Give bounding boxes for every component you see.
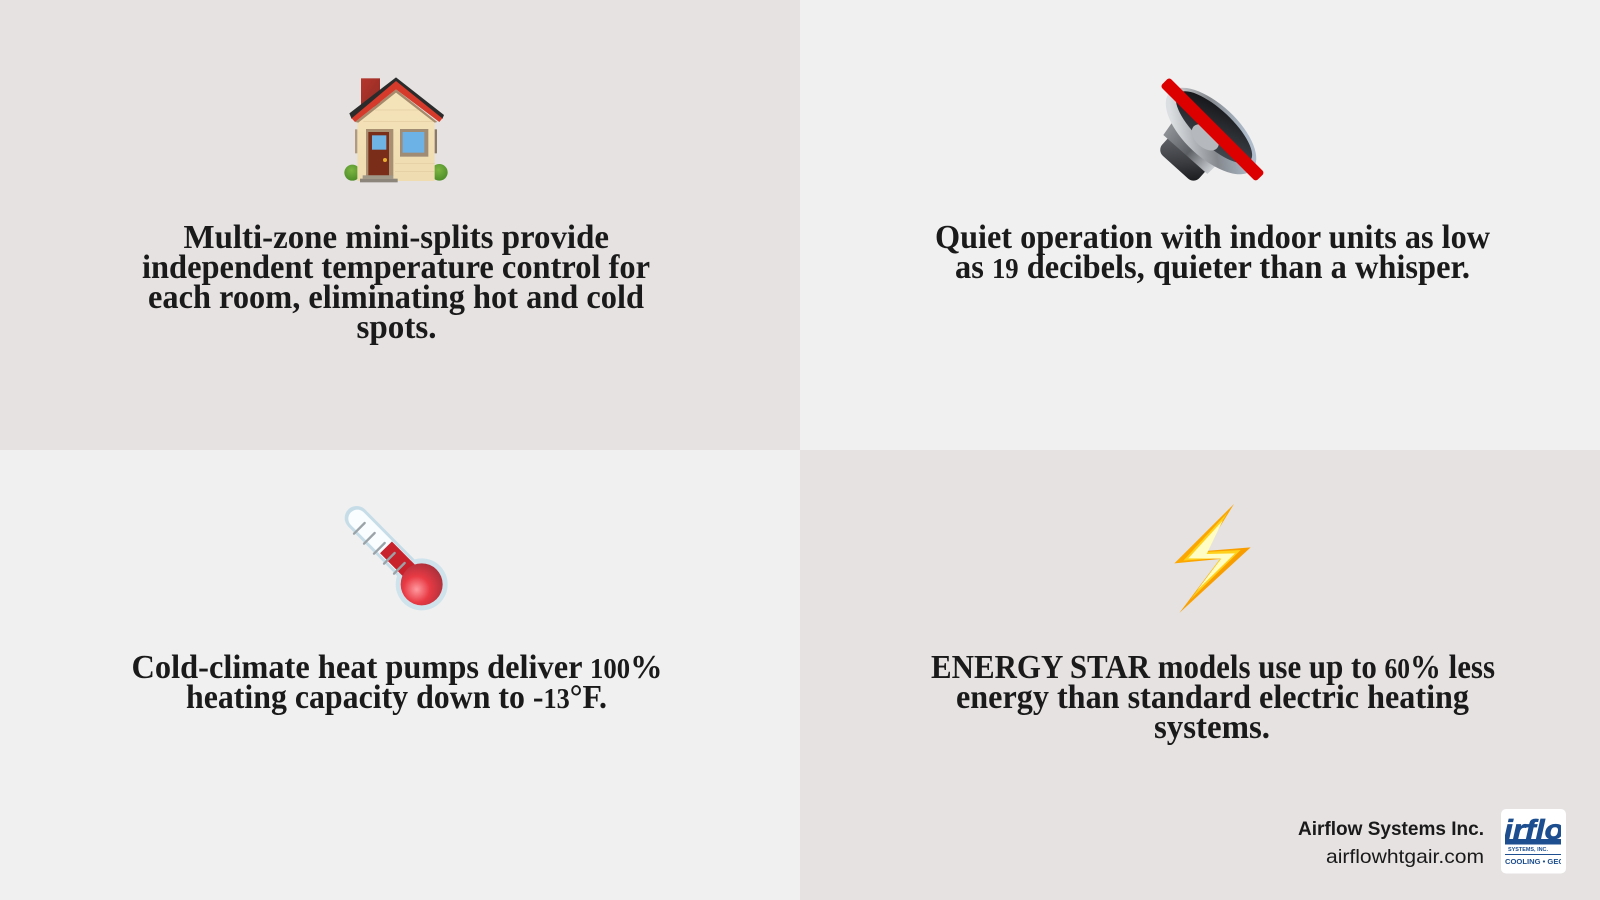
text: energy savings statement	[931, 649, 1495, 746]
panel: cold climate performance	[0, 450, 800, 900]
company name and website: airflowhtgair.com	[1326, 846, 1484, 868]
icon: muted speaker	[1151, 73, 1271, 189]
icon: lightning bolt	[1174, 504, 1251, 613]
text: multi-zone statement	[142, 219, 650, 346]
panel background	[800, 0, 1600, 450]
panel background	[800, 450, 1600, 900]
text: cold climate statement	[132, 649, 662, 716]
panel: energy savings	[800, 450, 1600, 900]
panel: multi-zone comfort	[0, 0, 800, 450]
text: quiet operation statement: Quiet operation with indoor units as low	[935, 219, 1490, 256]
text: quiet operation statement: as 19 decibels, quieter than a whisper.	[955, 249, 1470, 286]
text: cold climate statement: Cold-climate heat pumps deliver 100%	[132, 649, 662, 686]
panel background	[0, 0, 800, 450]
panel background	[0, 450, 800, 900]
text: energy savings statement: ENERGY STAR models use up to 60% less	[931, 649, 1495, 686]
text: quiet operation statement	[935, 219, 1490, 286]
text: multi-zone statement: each room, eliminating hot and cold	[148, 279, 644, 316]
company name and website: Airflow Systems Inc.	[1298, 819, 1484, 840]
text: cold climate statement: heating capacity down to -13°F.	[186, 679, 607, 716]
icon: thermometer	[354, 518, 448, 610]
text: multi-zone statement: spots.	[356, 309, 436, 346]
company name and website	[1298, 819, 1484, 868]
logo: Airflow Systems: irflo	[1504, 814, 1564, 845]
panel: quiet operation	[800, 0, 1600, 450]
text: energy savings statement: systems.	[1154, 709, 1270, 746]
text: energy savings statement: energy than standard electric heating	[956, 679, 1469, 716]
logo: Airflow Systems: COOLING • GEOT	[1505, 857, 1569, 866]
icon: house	[344, 77, 448, 182]
logo: Airflow Systems: SYSTEMS, INC.	[1508, 847, 1548, 853]
logo: Airflow Systems	[1501, 809, 1569, 874]
text: multi-zone statement: independent temperature control for	[142, 249, 650, 286]
text: multi-zone statement: Multi-zone mini-splits provide	[184, 219, 609, 256]
